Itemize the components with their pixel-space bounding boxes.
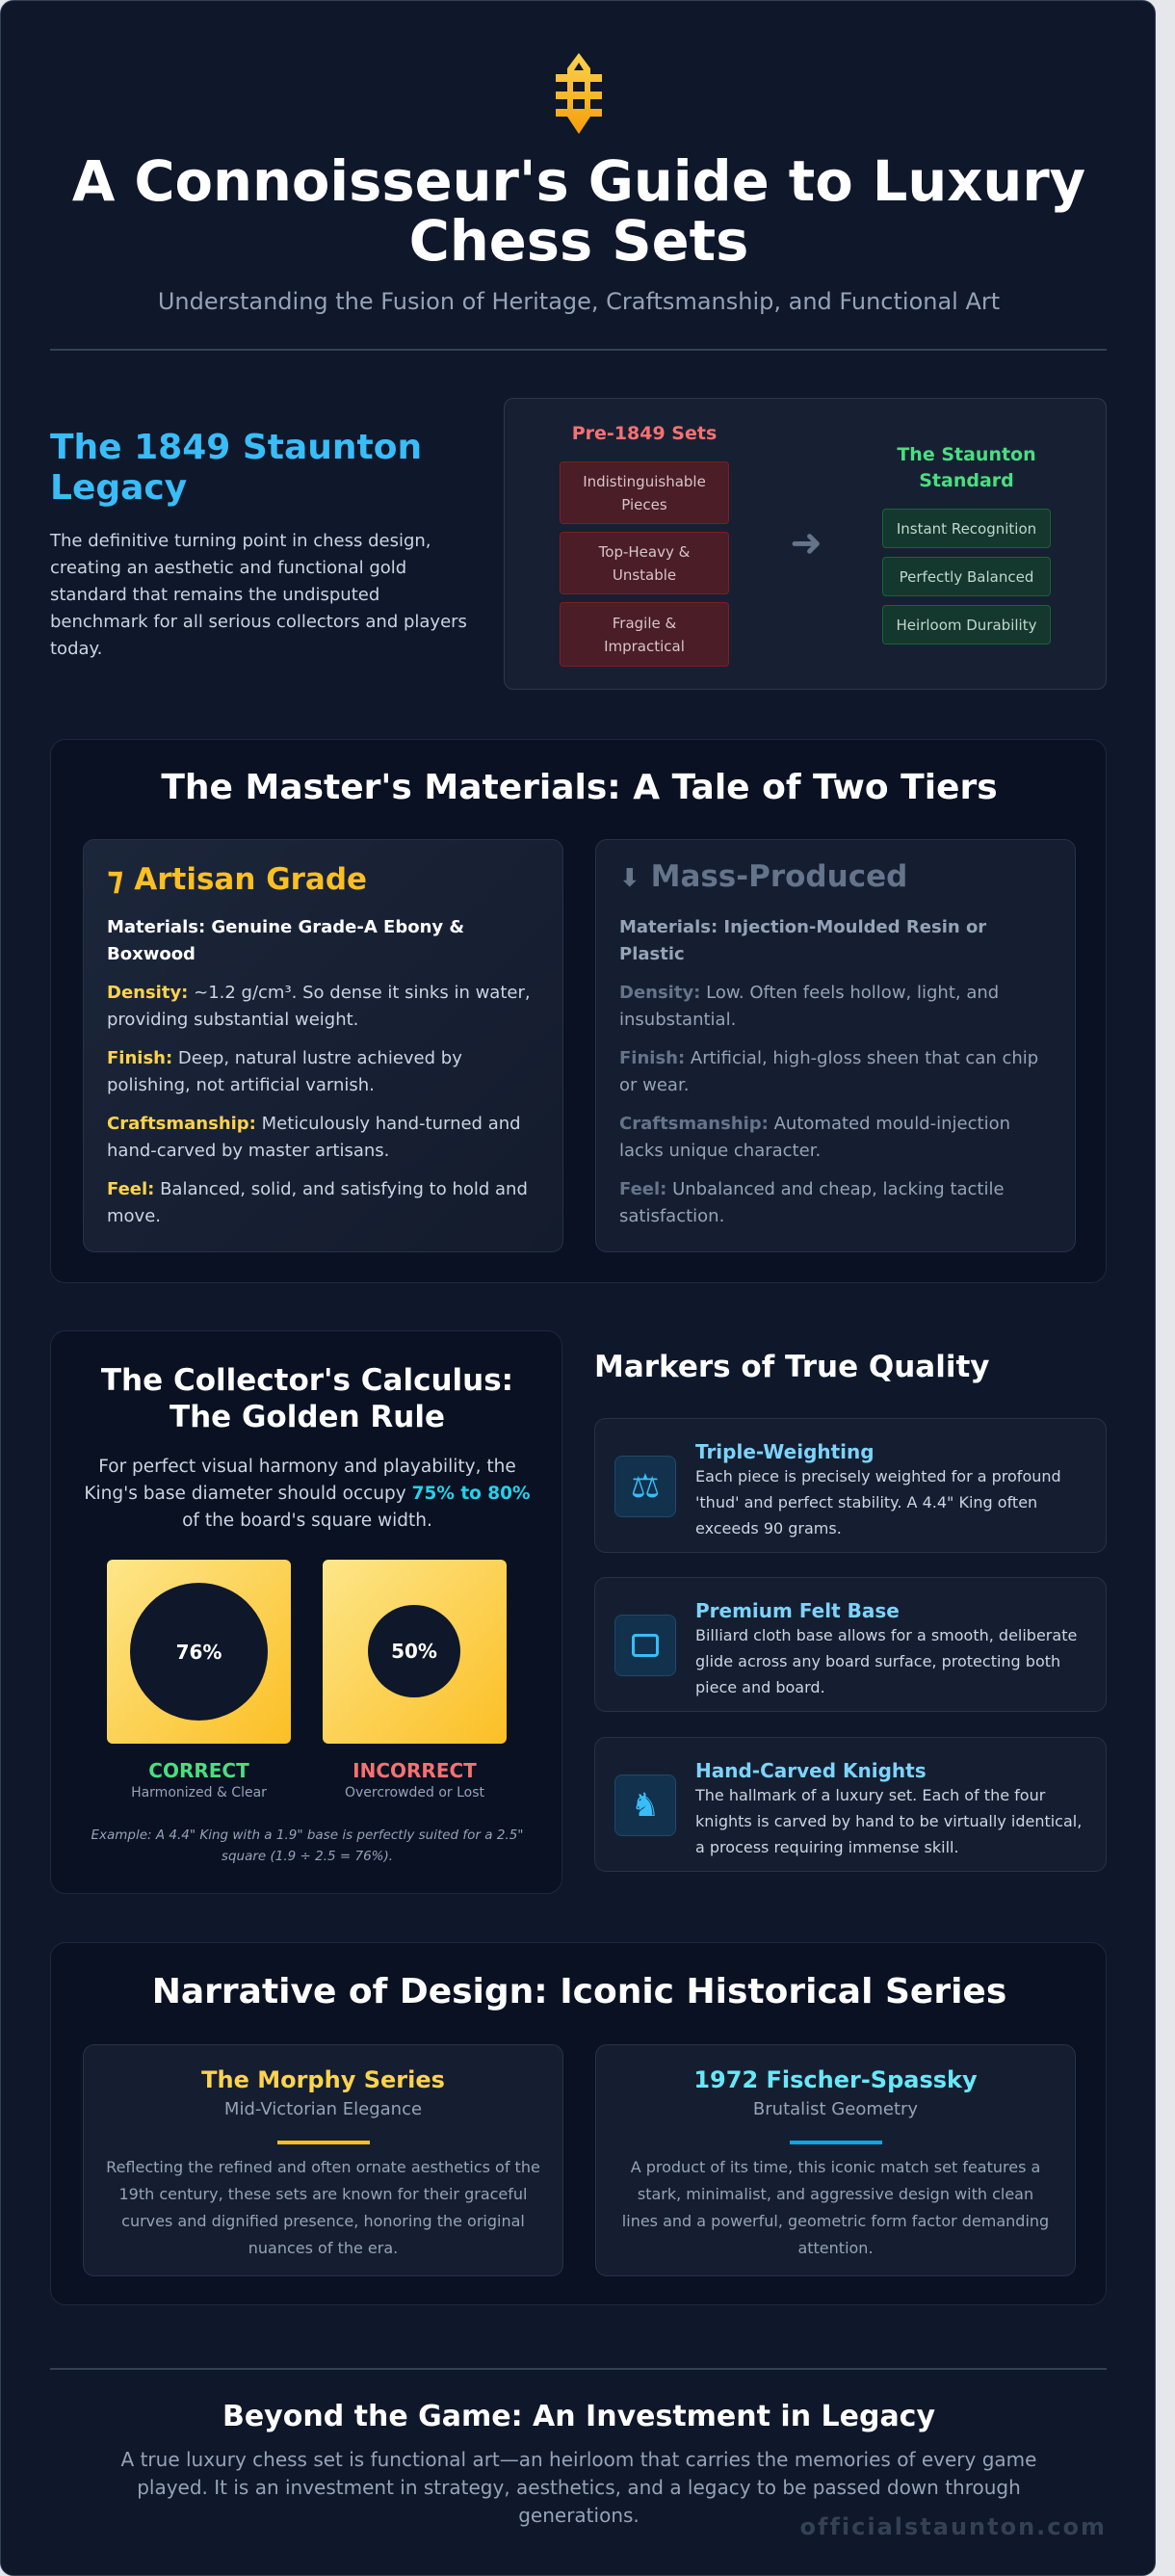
label: correct: CORRECT [148,1759,249,1782]
heading: markers of true quality: Markers of True Quality [594,1350,990,1384]
panel: materials [50,739,1107,1283]
title [72,149,1085,274]
heading: mass-produced: ⬇ Mass-Produced [619,859,907,894]
label: Staunton Standard: The Staunton [897,444,1036,465]
label: Pre-1849 Sets: Pre-1849 Sets [572,423,717,444]
card: mass-produced: Finish: Artificial, high-gloss sheen that can chip or wear. [619,1048,1038,1095]
title: A Connoisseur's Guide to Luxury [72,149,1085,214]
box: fragile: Fragile & [613,615,676,632]
card: triple-weighting: Triple-Weighting [695,1440,875,1463]
footer heading: Beyond the Game: An Investment in Legacy [222,2400,935,2433]
diagram: correct 76%: 76% [176,1640,222,1663]
card: hand-carved knights [594,1737,1107,1872]
card: mass-produced: Feel: Unbalanced and cheap, lacking tactile satisfaction. [619,1179,1005,1226]
label: incorrect: Overcrowded or Lost [345,1785,484,1801]
heading: materials: The Master's Materials: A Tale of Two Tiers [161,768,998,807]
card: fischer-spassky: 1972 Fischer-Spassky [693,2066,978,2093]
icon: scales: ⚖ [631,1467,660,1506]
card: felt base [594,1577,1107,1712]
paragraph: rule: For perfect visual harmony and playability, the King's base diameter should occupy 75% to 80% of the board's square width. [84,1457,531,1531]
card: fischer-spassky: A product of its time, this iconic match set features a stark, minimalist, and aggressive design with clean lines and a powerful, geometric form factor demanding attention. [622,2158,1049,2257]
icon: felt tablet [614,1615,676,1676]
label: Staunton Standard: Standard [919,470,1014,491]
icon: gold chess emblem [556,53,602,134]
example note: Example: A 4.4" King with a 1.9" base is perfectly suited for a 2.5" square (1.9 ÷ 2.5 = 76%). [91,1827,524,1864]
label: correct: Harmonized & Clear [131,1785,267,1801]
card: mass-produced [595,839,1076,1252]
label: Staunton Standard [897,444,1036,491]
box: indistinguishable: Indistinguishable [583,472,706,489]
card: triple-weighting: Each piece is precisely weighted for a profound 'thud' and perfect stability. A 4.4" King often exceeds 90 grams. [695,1467,1061,1538]
section: Staunton legacy text [50,428,467,659]
title: Chess Sets [409,209,748,274]
icon: knight: ♞ [631,1786,660,1825]
arrow: ➜ [790,521,822,565]
card: artisan grade: Finish: Deep, natural lustre achieved by polishing, not artificial varnish. [107,1048,462,1095]
card: felt base: Billiard cloth base allows for a smooth, deliberate glide across any board surface, protecting both piece and board. [695,1626,1077,1696]
card: felt base: Premium Felt Base [695,1599,900,1622]
watermark: officialstaunton.com [800,2513,1107,2540]
box: perfectly balanced: Perfectly Balanced [900,568,1033,586]
paragraph: The definitive turning point in chess design, creating an aesthetic and functional gold standard that remains the undisputed benchmark for all serious collectors and players today. [50,531,467,659]
label: correct [131,1759,267,1801]
diagram: incorrect 50%: 50% [391,1640,437,1663]
heading: golden rule: The Collector's Calculus: [101,1363,513,1398]
panel: narrative of design [50,1942,1107,2305]
card: fischer-spassky: Brutalist Geometry [753,2099,918,2119]
box: heirloom durability [882,605,1051,644]
heading: 1849 Staunton Legacy [50,428,422,508]
label: incorrect [345,1759,484,1801]
box: top-heavy: Top-Heavy & [599,543,690,561]
panel: pre-1849 vs Staunton comparison [504,398,1107,690]
card: hand-carved knights: Hand-Carved Knights [695,1759,927,1782]
diagram: correct 76% [107,1560,291,1744]
heading: 1849 Staunton Legacy: Legacy [50,468,187,508]
box: indistinguishable: Pieces [621,495,667,513]
card: morphy series: Mid-Victorian Elegance [224,2099,422,2119]
card: triple-weighting [594,1418,1107,1553]
card: artisan grade: Materials: Genuine Grade-A Ebony & Boxwood [107,917,464,964]
box: top-heavy [560,532,729,594]
card: artisan grade: Feel: Balanced, solid, and satisfying to hold and move. [107,1179,528,1226]
heading: golden rule [101,1363,513,1434]
heading: 1849 Staunton Legacy: The 1849 Staunton [50,428,422,467]
icon: scales [614,1456,676,1517]
box: instant recognition [882,509,1051,548]
box: instant recognition: Instant Recognition [897,520,1036,538]
diagram: incorrect 50% [323,1560,507,1744]
box: heirloom durability: Heirloom Durability [897,617,1036,634]
heading: narrative: Narrative of Design: Iconic Historical Series [152,1972,1006,2011]
icon: knight [614,1774,676,1836]
panel: collector's calculus [50,1330,562,1894]
box: top-heavy: Unstable [613,566,676,584]
card: morphy series: The Morphy Series [201,2066,445,2093]
card: fischer-spassky [595,2044,1076,2276]
card: morphy series: Reflecting the refined and often ornate aesthetics of the 19th century, these sets are known for their graceful curves and dignified presence, honoring the original nuances of the era. [106,2158,540,2257]
card: mass-produced: Materials: Injection-Moulded Resin or Plastic [619,917,986,964]
card: artisan grade: Density: ~1.2 g/cm³. So dense it sinks in water, providing substantial weight. [107,983,531,1030]
card: hand-carved knights: The hallmark of a luxury set. Each of the four knights is carved by hand to be virtually identical, a process requiring immense skill. [695,1786,1082,1856]
card: mass-produced: Craftsmanship: Automated mould-injection lacks unique character. [619,1114,1010,1161]
box: indistinguishable [560,461,729,524]
label: incorrect: INCORRECT [352,1759,477,1782]
card: morphy series [83,2044,563,2276]
card: mass-produced: Density: Low. Often feels hollow, light, and insubstantial. [619,983,999,1030]
box: fragile [560,602,729,667]
footer text: A true luxury chess set is functional art—an heirloom that carries the memories of every game played. It is an investment in strategy, aesthetics, and a legacy to be passed down through generations. [121,2448,1036,2527]
card: artisan grade [83,839,563,1252]
heading: golden rule: The Golden Rule [170,1400,445,1434]
box: fragile: Impractical [604,638,685,655]
heading: artisan grade: ⁊ Artisan Grade [107,859,367,898]
subtitle: Understanding the Fusion of Heritage, Craftsmanship, and Functional Art [158,288,1000,315]
box: perfectly balanced [882,557,1051,596]
card: artisan grade: Craftsmanship: Meticulously hand-turned and hand-carved by master artisans. [107,1114,521,1161]
